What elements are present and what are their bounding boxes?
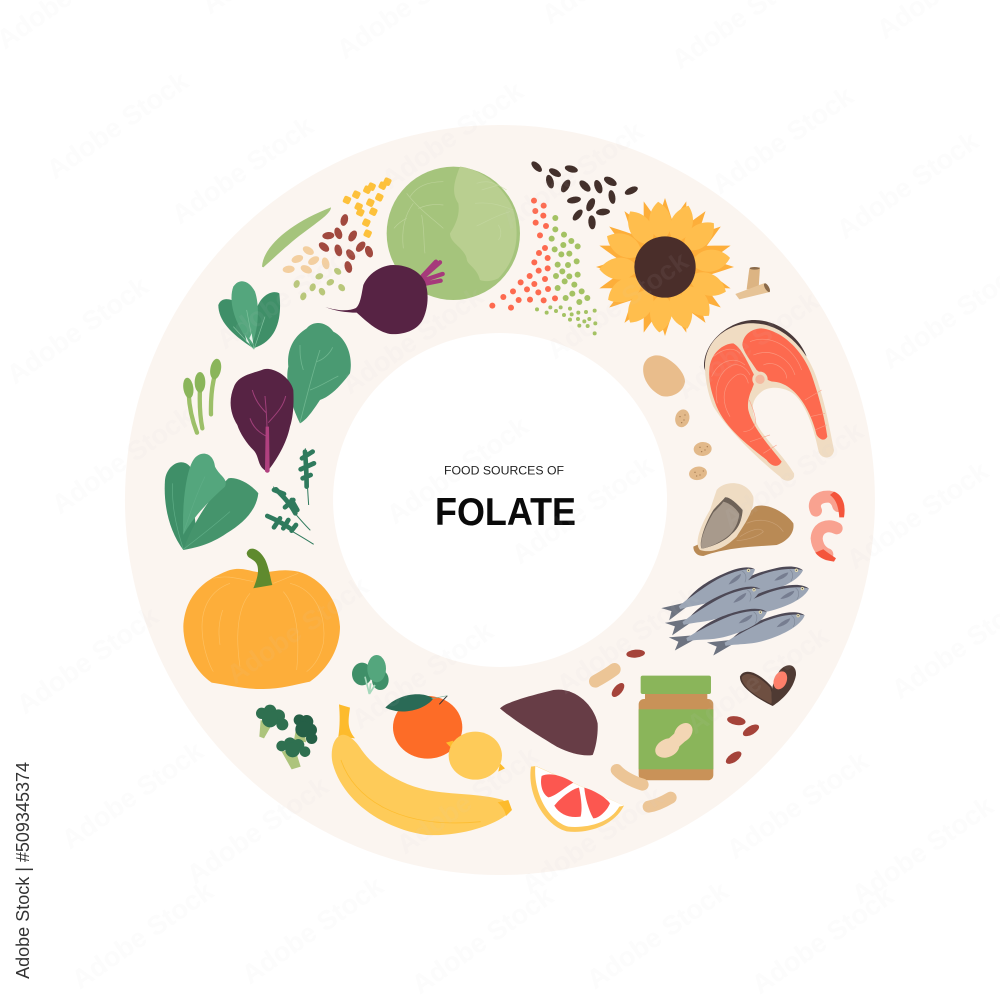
watermark: Adobe Stock [66, 875, 219, 995]
watermark: Adobe Stock [516, 780, 669, 900]
watermark: Adobe Stock [681, 620, 834, 740]
watermark: Adobe Stock [716, 415, 869, 535]
watermark: Adobe Stock [346, 615, 499, 735]
watermark: Adobe Stock [166, 110, 319, 230]
watermark: Adobe Stock [721, 745, 874, 865]
penne pasta [735, 267, 771, 299]
background ring [125, 125, 875, 875]
almonds [643, 355, 712, 481]
pumpkin [183, 549, 340, 689]
stock image id: Adobe Stock | #509345374 [13, 762, 33, 979]
shrimps [815, 492, 845, 562]
subtitle: FOOD SOURCES OF [444, 464, 564, 478]
watermark: Adobe Stock [706, 80, 859, 200]
peanuts [595, 669, 671, 807]
green peas [292, 266, 347, 301]
watermark: Adobe Stock [221, 570, 374, 690]
peanut on jar label [652, 719, 696, 761]
purple chard leaf [231, 369, 294, 473]
watermark: Adobe Stock [541, 245, 694, 365]
green lentil dots [535, 215, 597, 335]
broccoli [256, 705, 317, 769]
peanut butter jar [639, 676, 713, 780]
watermark: Adobe Stock [376, 75, 529, 195]
small spinach [352, 655, 389, 694]
salmon steak [704, 320, 834, 481]
watermark: Adobe Stock [211, 235, 364, 355]
watermark: Adobe Stock [336, 280, 489, 400]
watermark: Adobe Stock [746, 880, 899, 1000]
corn kernels [342, 177, 392, 239]
watermark: Adobe Stock [381, 410, 534, 530]
watermark: Adobe Stock [506, 450, 659, 570]
watermark: Adobe Stock [841, 455, 994, 575]
sunflower seeds [530, 160, 639, 230]
oyster [693, 483, 794, 556]
red lentil dots [489, 198, 558, 311]
asparagus [182, 358, 223, 433]
watermark: Adobe Stock [181, 770, 334, 890]
sunflower [595, 197, 735, 337]
watermark: Adobe Stock [236, 870, 389, 990]
watermark: Adobe Stock [46, 400, 199, 520]
banana [332, 704, 512, 835]
orange [385, 694, 462, 759]
large spinach leaf [165, 454, 258, 550]
tan beans [282, 244, 331, 275]
watermark: Adobe Stock [1, 270, 154, 390]
sardines [659, 561, 812, 658]
watermark: Adobe Stock [41, 65, 194, 185]
watermark: Adobe Stock [831, 125, 984, 245]
watermark: Adobe Stock [11, 600, 164, 720]
kidney beans [317, 213, 374, 274]
liver [500, 690, 598, 755]
watermark: Adobe Stock [671, 285, 824, 405]
green bean [262, 207, 331, 267]
watermark: Adobe Stock [551, 580, 704, 700]
main heading: FOLATE [435, 491, 576, 534]
mussel [740, 665, 796, 706]
watermark: Adobe Stock [391, 740, 544, 860]
cabbage [387, 167, 520, 300]
beetroot [325, 262, 443, 334]
spinach leaves [218, 281, 280, 349]
watermark: Adobe Stock [496, 115, 649, 235]
grapefruit slice [530, 766, 624, 832]
lemon [446, 732, 505, 780]
green chard leaf [287, 323, 351, 423]
title [435, 464, 576, 534]
red almonds [609, 649, 761, 766]
watermark: Adobe Stock [56, 735, 209, 855]
watermark: Adobe Stock [846, 790, 999, 910]
arugula [266, 448, 314, 544]
watermark: Adobe Stock [581, 875, 734, 995]
watermark: Adobe Stock [406, 880, 559, 1000]
